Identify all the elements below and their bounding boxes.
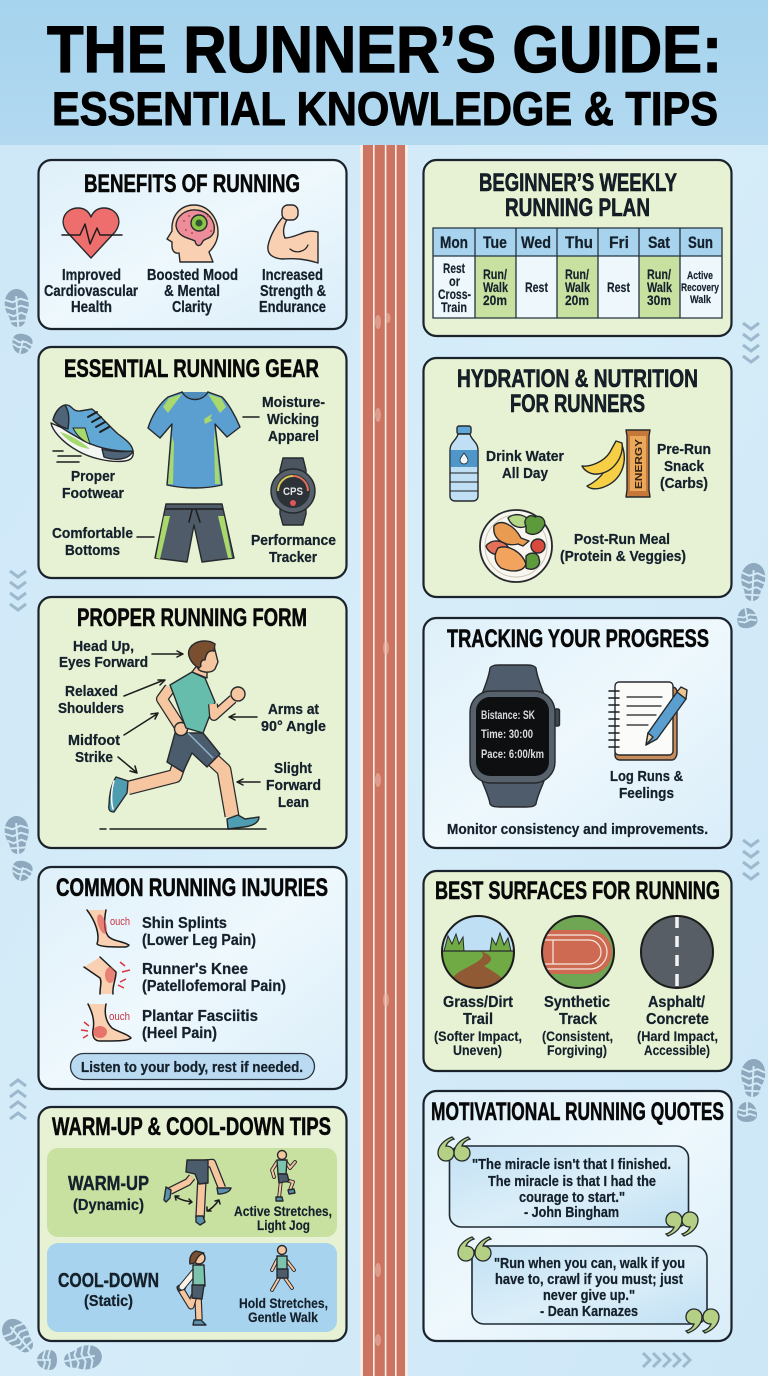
table body: Rest	[607, 279, 630, 295]
text: cool-down: COOL-DOWN	[58, 1270, 159, 1292]
icon: leg swing	[164, 1160, 231, 1225]
table header row: Sun	[688, 233, 713, 252]
table body: Run/	[483, 266, 507, 282]
icon: shirt	[148, 392, 240, 488]
table body: Walk	[565, 279, 590, 295]
heading	[479, 169, 677, 222]
callout: arms at 90: Arms at	[268, 701, 319, 718]
watch readout	[481, 710, 544, 761]
label: log runs	[610, 768, 683, 802]
panel: essential running gear	[38, 347, 346, 578]
callout: relaxed shoulders: Shoulders	[58, 700, 124, 717]
label: pre-run snack: Snack	[664, 458, 705, 475]
heading: RUNNING PLAN	[505, 194, 650, 222]
panel: beginner's weekly running plan	[424, 160, 732, 336]
callout: relaxed shoulders: Relaxed	[65, 683, 118, 700]
back arm	[162, 688, 180, 727]
callout: head up	[59, 638, 183, 671]
table body: Active	[687, 270, 713, 282]
label: bottoms: Comfortable	[52, 525, 133, 542]
icon: bananas and bar: ENERGY	[633, 439, 645, 489]
table body: Train	[441, 299, 467, 315]
heading: ESSENTIAL RUNNING GEAR	[64, 355, 319, 383]
neck and head	[192, 664, 207, 678]
table header row: Mon	[440, 233, 468, 252]
table body: Walk	[690, 294, 712, 306]
label: asphalt: Concrete	[646, 1011, 709, 1028]
label: bottoms	[52, 525, 154, 559]
front leg	[211, 758, 232, 816]
label: asphalt: Asphalt/	[648, 994, 705, 1011]
icon: bananas and bar	[582, 430, 650, 497]
label: post-run meal	[560, 531, 686, 565]
icon: head with brain	[167, 205, 218, 262]
heading: FOR RUNNERS	[510, 390, 645, 418]
label: pre-run snack: (Carbs)	[660, 475, 708, 492]
icon: shorts	[155, 504, 234, 562]
label: cardiovascular: Improved	[62, 267, 121, 284]
quote text: - Dean Karnazes	[540, 1303, 638, 1320]
panel: hydration and nutrition	[424, 358, 732, 597]
callout: forward lean: Forward	[266, 777, 321, 794]
label: grass: Grass/Dirt	[443, 994, 514, 1011]
label: grass: Uneven)	[453, 1042, 502, 1058]
callout: head up: Head Up,	[73, 638, 134, 655]
header band	[0, 0, 768, 145]
table body: or	[449, 273, 460, 289]
callout pill	[70, 1054, 314, 1080]
label: strength	[259, 267, 326, 316]
callout: arms at 90: 90° Angle	[261, 718, 326, 735]
callout: forward lean: Lean	[278, 794, 309, 811]
label: synthetic: (Consistent,	[542, 1028, 613, 1044]
heading: BENEFITS OF RUNNING	[84, 170, 300, 198]
text: shin splints	[142, 915, 256, 949]
label: Hold Stretches,	[239, 1295, 328, 1311]
icon: heel	[81, 1004, 131, 1041]
table header row: Thu	[565, 233, 593, 252]
table body: 20m	[483, 292, 507, 308]
label: Active Stretches,	[234, 1203, 332, 1219]
label: pre-run snack: Pre-Run	[657, 441, 711, 458]
icon: smart watch	[470, 665, 560, 807]
label: mood: & Mental	[164, 283, 220, 300]
label: footwear: Proper	[71, 468, 115, 485]
label: drink water	[486, 448, 564, 482]
panel: tracking your progress	[424, 618, 732, 848]
text: runner's knee: (Patellofemoral Pain)	[142, 978, 286, 995]
text: cool-down: (Static)	[84, 1293, 133, 1310]
label: post-run meal: Post-Run Meal	[574, 531, 670, 548]
icon: heel: ouch	[109, 1011, 130, 1023]
icon: synthetic track	[542, 916, 614, 988]
quote text: have to, crawl if you must; just	[495, 1271, 683, 1288]
chevrons	[10, 323, 759, 1367]
label: pre-run snack	[657, 441, 711, 492]
text: warm-up: (Dynamic)	[73, 1197, 144, 1214]
text: shin splints: Shin Splints	[142, 915, 227, 932]
footprints left	[0, 288, 104, 1373]
label: synthetic	[542, 994, 613, 1058]
table body: Run/	[565, 266, 589, 282]
label: post-run meal: (Protein & Veggies)	[560, 548, 686, 565]
label: footwear: Footwear	[62, 485, 124, 502]
table header row: Fri	[609, 233, 629, 252]
label: strength: Strength &	[260, 283, 326, 300]
table body: Rest	[443, 260, 465, 276]
icon: walker	[272, 1246, 294, 1290]
table body	[438, 260, 720, 315]
callout: head up: Eyes Forward	[59, 654, 148, 671]
quote one	[438, 1137, 698, 1236]
rear leg	[128, 762, 180, 788]
heading	[457, 365, 698, 418]
label: apparel: Moisture-	[262, 394, 325, 411]
label: mood	[147, 267, 238, 316]
table body: Rest	[525, 279, 548, 295]
label: drink water: Drink Water	[486, 448, 564, 465]
heading: HYDRATION & NUTRITION	[457, 365, 698, 393]
cool-down band	[47, 1243, 337, 1332]
text: warm-up: WARM-UP	[68, 1173, 149, 1195]
panel: common running injuries	[38, 867, 346, 1089]
shorts	[167, 733, 220, 772]
label: grass	[434, 994, 522, 1058]
label: asphalt	[637, 994, 718, 1058]
quote text	[472, 1156, 671, 1221]
quote text: courage to start."	[519, 1189, 625, 1206]
icon: notebook and pen	[609, 682, 687, 760]
text: runner's knee: Runner's Knee	[142, 961, 248, 978]
heading: BEGINNER’S WEEKLY	[479, 169, 677, 197]
quote text: "The miracle isn't that I finished.	[472, 1156, 671, 1173]
panel: proper running form	[38, 597, 346, 848]
footprints right	[735, 562, 766, 1122]
title	[47, 12, 722, 135]
label: mood: Clarity	[172, 299, 212, 316]
caption: Monitor consistency and improvements.	[447, 821, 708, 838]
callout: midfoot strike	[68, 713, 158, 773]
callout: midfoot strike: Strike	[75, 749, 113, 766]
table header row: Wed	[521, 233, 551, 252]
table body: Cross-	[438, 286, 471, 302]
label: cardiovascular: Cardiovascular	[44, 283, 138, 300]
icon: plate of food	[480, 510, 552, 582]
label: asphalt: Accessible)	[644, 1042, 710, 1058]
label: asphalt: (Hard Impact,	[637, 1028, 718, 1044]
quote text	[494, 1255, 685, 1320]
icon: heart	[62, 208, 122, 258]
label: tracker	[251, 532, 336, 566]
table body: Recovery	[681, 282, 720, 294]
heading: COMMON RUNNING INJURIES	[56, 874, 328, 902]
icon: flexed arm	[268, 205, 318, 263]
table: weekly plan	[433, 228, 722, 318]
label: Gentle Walk	[248, 1309, 318, 1325]
text: plantar fasciitis	[142, 1008, 258, 1042]
label: apparel: Apparel	[268, 428, 319, 445]
torso	[170, 672, 215, 733]
heading: WARM-UP & COOL-DOWN TIPS	[52, 1113, 331, 1141]
table header row: Tue	[483, 233, 507, 252]
label: cardiovascular	[44, 267, 138, 316]
quote text: "Run when you can, walk if you	[494, 1255, 685, 1272]
front shoe	[227, 815, 259, 829]
label: grass: Trail	[463, 1011, 493, 1028]
quote two	[458, 1237, 719, 1333]
table body: Walk	[647, 279, 672, 295]
callout: forward lean	[237, 760, 321, 811]
label: Light Jog	[257, 1217, 310, 1233]
label	[239, 1295, 328, 1325]
label: log runs: Feelings	[619, 785, 674, 802]
quote marks	[438, 1137, 698, 1236]
icon: knee	[84, 957, 130, 994]
label: strength: Increased	[262, 267, 323, 284]
label: synthetic: Forgiving)	[547, 1042, 607, 1058]
quote text: The miracle is that I had the	[488, 1173, 656, 1190]
table body: 30m	[647, 292, 671, 308]
front arm	[213, 699, 233, 716]
panel: warm-up and cool-down tips	[38, 1107, 346, 1341]
warm-up band	[47, 1148, 337, 1237]
icon: water bottle	[450, 426, 478, 501]
label: cardiovascular: Health	[71, 299, 112, 316]
text: shin splints: (Lower Leg Pain)	[142, 932, 256, 949]
label: log runs: Log Runs &	[610, 768, 683, 785]
watch readout: Time: 30:00	[481, 729, 533, 741]
panel: benefits of running	[38, 160, 346, 329]
label: tracker: Performance	[251, 532, 336, 549]
watch readout: Bistance: SK	[481, 710, 536, 722]
quote text: - John Bingham	[524, 1204, 619, 1221]
table body: Walk	[483, 279, 508, 295]
running track divider	[360, 145, 408, 1376]
label: synthetic: Track	[559, 1011, 597, 1028]
panel: best surfaces for running	[424, 871, 732, 1071]
label: mood: Boosted Mood	[147, 267, 238, 284]
text: runner's knee	[142, 961, 286, 995]
label: apparel	[243, 394, 325, 445]
table header row	[440, 233, 713, 252]
callout pill: Listen to your body, rest if needed.	[81, 1059, 303, 1076]
label	[234, 1203, 332, 1233]
table body: 20m	[565, 292, 589, 308]
label: tracker: Tracker	[269, 549, 317, 566]
table body: Run/	[647, 266, 671, 282]
label: bottoms: Bottoms	[65, 542, 120, 559]
text: cool-down	[58, 1270, 159, 1310]
callout: midfoot strike: Midfoot	[68, 732, 120, 749]
rear shoe	[109, 777, 128, 812]
text: plantar fasciitis: (Heel Pain)	[142, 1025, 217, 1042]
icon: standing stretch	[177, 1251, 206, 1325]
label: footwear	[62, 468, 124, 502]
heading: PROPER RUNNING FORM	[77, 604, 307, 632]
text: warm-up	[68, 1173, 149, 1214]
watch readout: Pace: 6:00/km	[481, 749, 544, 761]
label: strength: Endurance	[259, 299, 326, 316]
label: grass: (Softer Impact,	[434, 1028, 522, 1044]
callout: arms at 90	[229, 701, 326, 735]
table header row: Sat	[648, 233, 670, 252]
icon: shoe	[51, 405, 133, 462]
callout: forward lean: Slight	[274, 760, 312, 777]
illustration: runner	[109, 641, 259, 829]
icon: jogger	[272, 1150, 295, 1201]
icon: shin: ouch	[110, 916, 130, 928]
callout: relaxed shoulders	[58, 680, 165, 717]
label: synthetic: Synthetic	[544, 994, 610, 1011]
text: plantar fasciitis: Plantar Fasciitis	[142, 1008, 258, 1025]
panel: motivational running quotes	[424, 1091, 732, 1341]
quote text: never give up."	[543, 1287, 635, 1304]
icon: gps watch	[271, 458, 315, 525]
icon: grass trail	[442, 916, 514, 990]
icon: gps watch: CPS	[283, 486, 303, 498]
icon: asphalt road	[641, 916, 713, 988]
quote marks	[458, 1237, 719, 1333]
label: apparel: Wicking	[267, 411, 319, 428]
label: drink water: All Day	[502, 465, 549, 482]
icon: shin	[87, 910, 130, 947]
